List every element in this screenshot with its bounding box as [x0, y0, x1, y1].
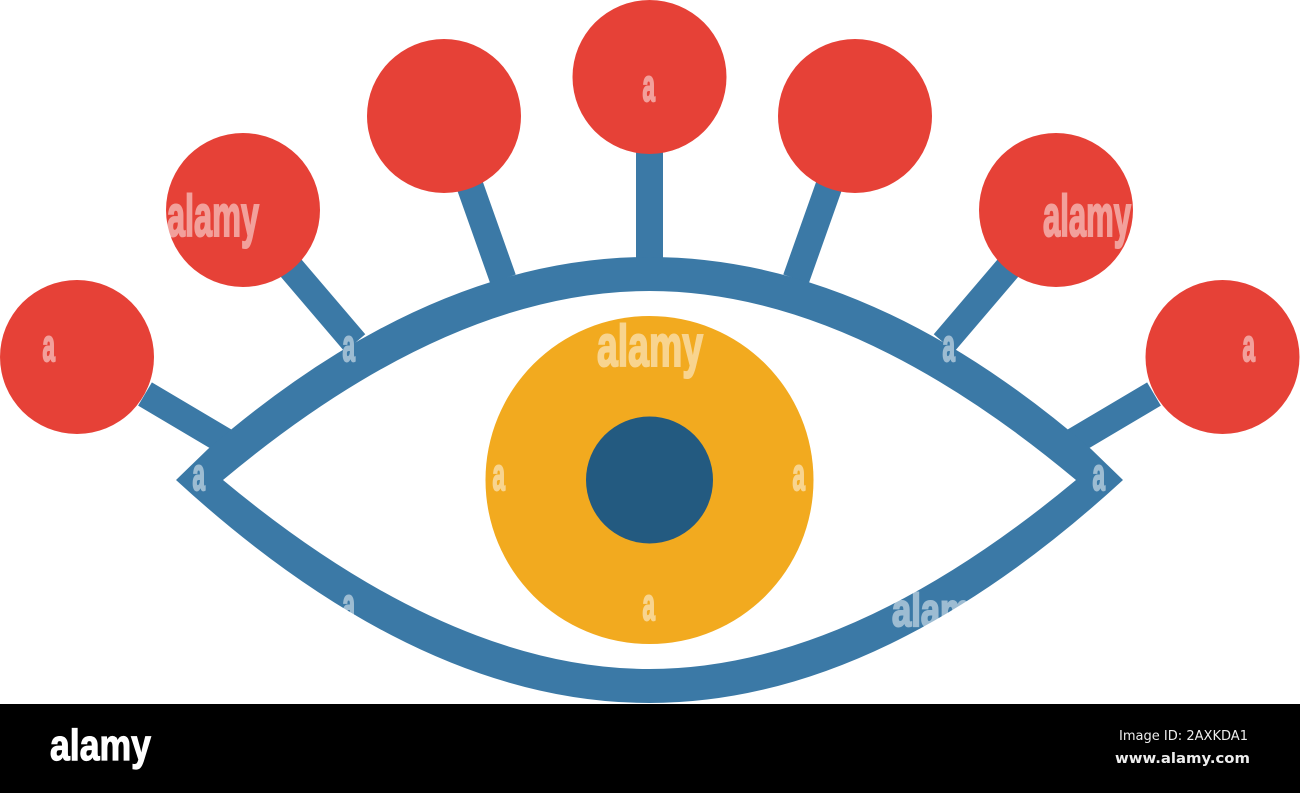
- website: www.alamy.com: [1115, 751, 1250, 767]
- watermarks: a: [1242, 320, 1255, 371]
- eye outline: [176, 257, 1123, 703]
- watermarks: a: [792, 449, 805, 500]
- footer bar: [0, 704, 1300, 793]
- footer logo: alamy: [50, 721, 151, 770]
- watermarks: alamy: [167, 184, 259, 249]
- watermarks: a: [342, 579, 355, 630]
- watermarks: a: [942, 320, 955, 371]
- watermarks: a: [42, 320, 55, 371]
- watermarks: a: [342, 320, 355, 371]
- watermarks: alamy: [1043, 184, 1131, 249]
- watermarks: alamy: [597, 314, 703, 379]
- watermarks: a: [642, 60, 655, 111]
- iris: [486, 316, 814, 644]
- watermarks: a: [192, 449, 205, 500]
- pupil: [586, 416, 713, 544]
- watermarks: a: [492, 449, 505, 500]
- watermarks: a: [1092, 449, 1105, 500]
- image id: Image ID: 2AXKDA1: [1119, 728, 1248, 744]
- watermarks: a: [642, 579, 655, 630]
- watermarks: [42, 60, 1255, 636]
- watermarks: alamy: [892, 584, 990, 636]
- eyelash balls: [0, 0, 1300, 434]
- eyelash stems: [145, 150, 1154, 442]
